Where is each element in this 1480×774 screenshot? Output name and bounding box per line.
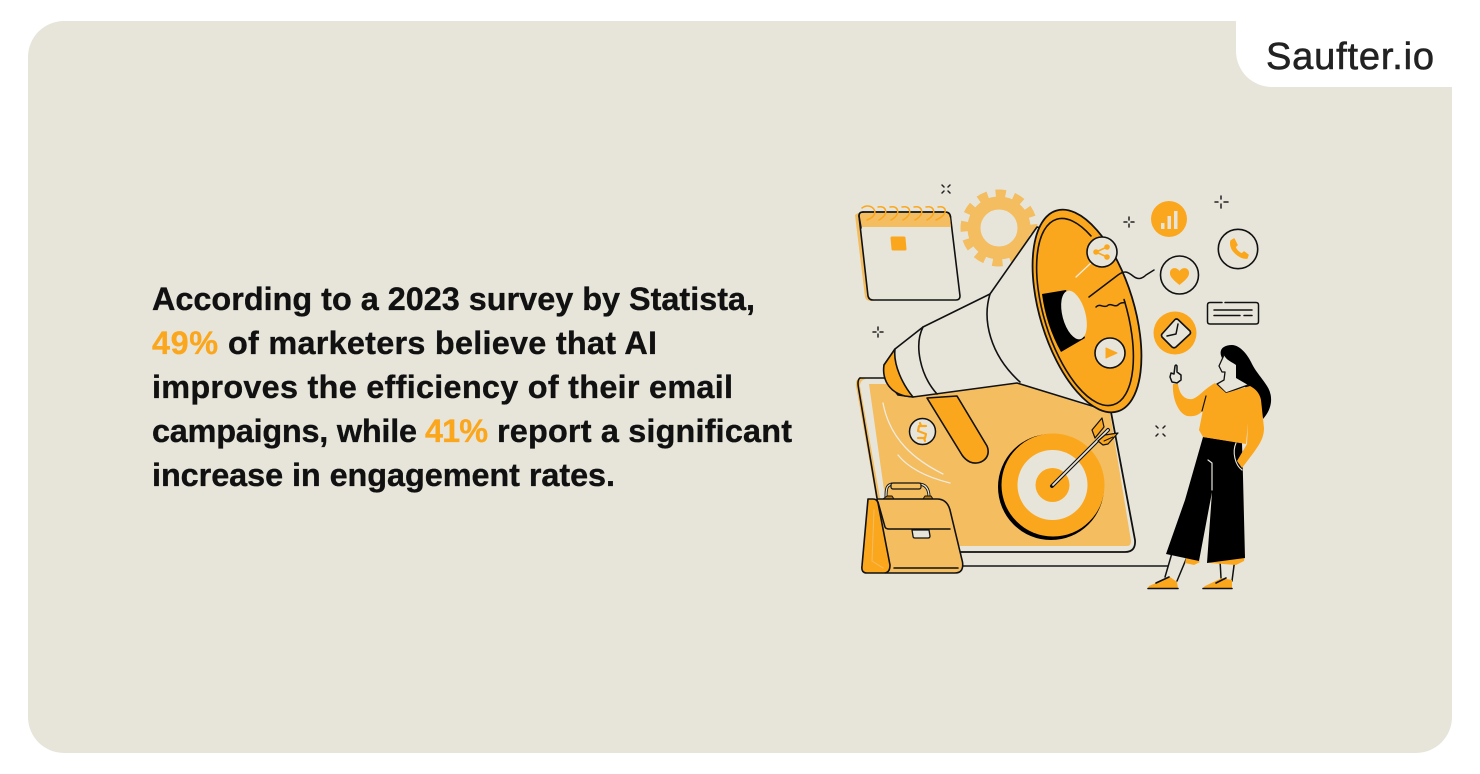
icon: dollar coin xyxy=(910,418,936,444)
icon: calendar xyxy=(855,206,960,301)
trouser lining xyxy=(1185,555,1245,565)
icon: bar chart xyxy=(1151,201,1187,237)
logo tab xyxy=(1236,21,1452,87)
icon: play button xyxy=(1095,338,1125,368)
icon: gear xyxy=(963,192,1035,264)
icon: heart xyxy=(1160,256,1198,294)
trousers xyxy=(1166,437,1245,563)
illustration: marketing megaphone scene xyxy=(855,185,1271,589)
target with dart xyxy=(998,418,1118,540)
megaphone handle xyxy=(927,396,988,463)
briefcase side pocket xyxy=(862,499,890,573)
hand xyxy=(1170,365,1181,383)
sparkles xyxy=(873,185,1228,436)
logo: Saufter.io: Saufter.io xyxy=(1266,36,1434,78)
statistic text block: report a significant xyxy=(497,413,792,449)
dart xyxy=(1052,430,1108,486)
statistic text block: increase in engagement rates. xyxy=(152,457,615,493)
orange top xyxy=(1173,383,1264,468)
megaphone xyxy=(884,197,1163,463)
icon: phone xyxy=(1218,229,1258,269)
statistic text block xyxy=(152,281,792,493)
shoes xyxy=(1148,577,1178,589)
megaphone back cap xyxy=(884,349,913,397)
statistic text block: 41% xyxy=(425,413,488,449)
briefcase xyxy=(862,483,963,573)
icon: envelope xyxy=(1154,312,1196,354)
statistic text block: of marketers believe that AI xyxy=(228,325,657,361)
face xyxy=(1217,355,1248,393)
icon: share xyxy=(1087,237,1117,267)
megaphone cone xyxy=(884,227,1130,410)
megaphone horn xyxy=(1011,197,1163,425)
horn opening xyxy=(1056,288,1092,342)
statistic text block: campaigns, while xyxy=(152,413,417,449)
statistic text block: According to a 2023 survey by Statista, xyxy=(152,281,755,317)
legs xyxy=(1165,553,1187,581)
hair xyxy=(1221,345,1271,419)
squiggle lines xyxy=(1089,270,1154,297)
statistic text block: 49% xyxy=(152,325,218,361)
statistic text block: improves the efficiency of their email xyxy=(152,369,733,405)
horn black wedge xyxy=(1042,290,1085,352)
laptop screen xyxy=(856,378,1170,566)
icon: message card xyxy=(1208,302,1258,324)
woman figure xyxy=(1148,345,1271,589)
